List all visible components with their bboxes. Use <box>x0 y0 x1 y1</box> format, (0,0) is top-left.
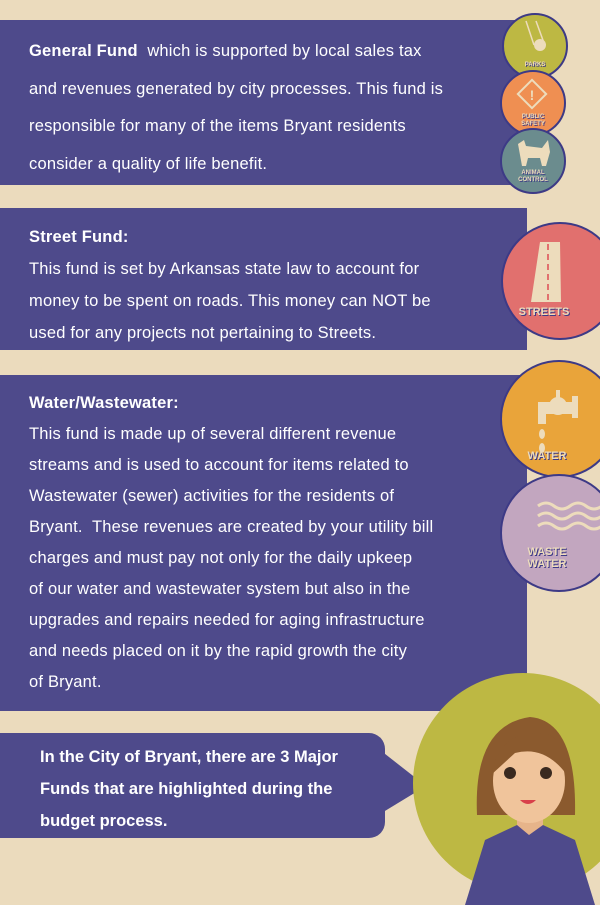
panel: water/wastewater: Wastewater (sewer) activities for the residents of <box>29 487 394 505</box>
panel: water/wastewater: Bryant. These revenues are created by your utility bill <box>29 518 433 536</box>
panel: street fund: Street Fund: <box>29 228 129 246</box>
icon: animal control: ANIMAL <box>521 170 545 176</box>
callout: 3 major funds: In the City of Bryant, there are 3 Major <box>40 748 338 766</box>
panel: general fund: and revenues generated by city processes. This fund is <box>29 80 443 98</box>
icon: wastewater: WATER <box>528 558 566 570</box>
icon: streets: STREETS <box>519 306 569 318</box>
panel: general fund: responsible for many of the items Bryant residents <box>29 117 406 135</box>
arrow: callout pointer <box>385 754 414 811</box>
callout: 3 major funds: budget process. <box>40 812 167 830</box>
icon: animal control: CONTROL <box>518 177 548 183</box>
icon: public safety <box>500 70 566 136</box>
panel: street fund: used for any projects not pertaining to Streets. <box>29 324 376 342</box>
panel: water/wastewater: Water/Wastewater: <box>29 394 179 412</box>
panel: water/wastewater: of our water and wastewater system but also in the <box>29 580 410 598</box>
panel: street fund: This fund is set by Arkansas state law to account for <box>29 260 419 278</box>
icon: wastewater: WASTE <box>527 546 567 558</box>
icon: wastewater <box>500 474 600 592</box>
panel: general fund <box>0 20 525 185</box>
icon: public safety: ! <box>530 87 534 103</box>
icon: public safety: PUBLIC <box>522 114 544 120</box>
panel: water/wastewater: streams and is used to account for items related to <box>29 456 409 474</box>
callout: 3 major funds <box>0 733 385 838</box>
panel: water/wastewater: of Bryant. <box>29 673 102 691</box>
icon: streets <box>501 222 600 340</box>
panel: street fund: money to be spent on roads. This money can NOT be <box>29 292 431 310</box>
panel: street fund <box>0 208 527 350</box>
icon: water <box>500 360 600 478</box>
panel: water/wastewater: This fund is made up of several different revenue <box>29 425 396 443</box>
panel: general fund: General Fund which is supported by local sales tax <box>29 42 422 60</box>
callout: 3 major funds: Funds that are highlighted during the <box>40 780 332 798</box>
icon: animal control <box>500 128 566 194</box>
icon: water: WATER <box>528 450 566 462</box>
panel: water/wastewater: upgrades and repairs needed for aging infrastructure <box>29 611 425 629</box>
icon: public safety: SAFETY <box>521 121 545 127</box>
panel: general fund: consider a quality of life benefit. <box>29 154 267 172</box>
panel: water/wastewater: and needs placed on it by the rapid growth the city <box>29 642 407 660</box>
panel: water/wastewater <box>0 375 527 711</box>
panel: water/wastewater: charges and must pay not only for the daily upkeep <box>29 549 412 567</box>
icon: parks <box>502 13 568 79</box>
avatar: woman <box>413 673 600 905</box>
icon: parks: PARKS <box>525 62 545 68</box>
